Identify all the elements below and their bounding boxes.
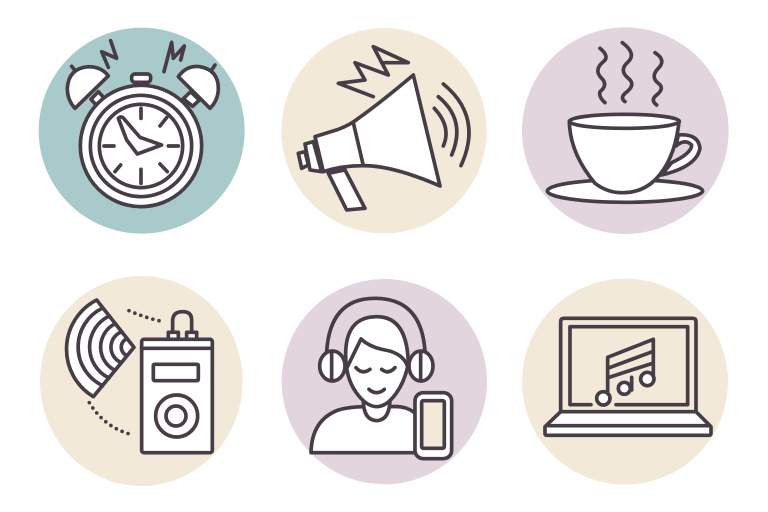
music notes	[597, 339, 654, 405]
mauve background circle	[522, 27, 729, 234]
cream background circle	[522, 279, 728, 485]
teal background circle	[39, 28, 245, 234]
mouthpiece ring	[305, 142, 322, 172]
icon: music player with signal	[40, 276, 243, 486]
handle	[328, 170, 365, 210]
dotted line top	[129, 311, 163, 322]
top edge line	[142, 343, 212, 354]
left alarm spark	[102, 41, 117, 67]
mouthpiece cap	[298, 152, 308, 168]
clock hands	[118, 117, 162, 154]
phone	[415, 393, 452, 459]
cup body	[569, 122, 679, 193]
cup handle	[662, 135, 700, 175]
hair	[346, 317, 408, 370]
icon: person with headphones and phone	[282, 279, 487, 484]
cone	[315, 75, 440, 186]
clock face	[80, 85, 202, 207]
right bell	[178, 65, 218, 108]
right alarm spark	[164, 42, 184, 72]
smile	[369, 389, 384, 393]
cup rim	[569, 114, 679, 128]
sound spark	[338, 47, 408, 97]
steam	[598, 43, 662, 105]
face	[347, 339, 408, 407]
sound waves	[434, 84, 469, 166]
icon: megaphone	[281, 28, 487, 233]
cream background circle	[281, 28, 487, 233]
cone divider	[353, 123, 363, 166]
neck	[363, 398, 390, 421]
base line	[548, 420, 708, 431]
saucer	[547, 180, 703, 202]
icon: alarm clock	[39, 28, 245, 234]
right ear cup	[409, 351, 433, 381]
headphone cable	[173, 312, 192, 332]
laptop lid	[561, 318, 696, 412]
icon: coffee cup	[522, 27, 729, 234]
top button	[132, 74, 151, 87]
laptop screen	[570, 327, 688, 405]
click wheel	[156, 395, 198, 437]
headband	[327, 298, 425, 352]
connectors	[168, 332, 197, 339]
left ear cup	[320, 351, 345, 381]
dotted line bottom	[89, 403, 133, 435]
player body	[142, 339, 212, 453]
screen	[153, 364, 198, 381]
signal waves	[67, 300, 134, 397]
icon: laptop with music notes	[522, 279, 728, 485]
laptop base	[545, 412, 711, 435]
shoulders	[311, 407, 418, 453]
eyes	[356, 368, 395, 372]
left bell	[67, 66, 108, 108]
mauve background circle	[282, 279, 487, 484]
cream background circle	[40, 276, 243, 486]
